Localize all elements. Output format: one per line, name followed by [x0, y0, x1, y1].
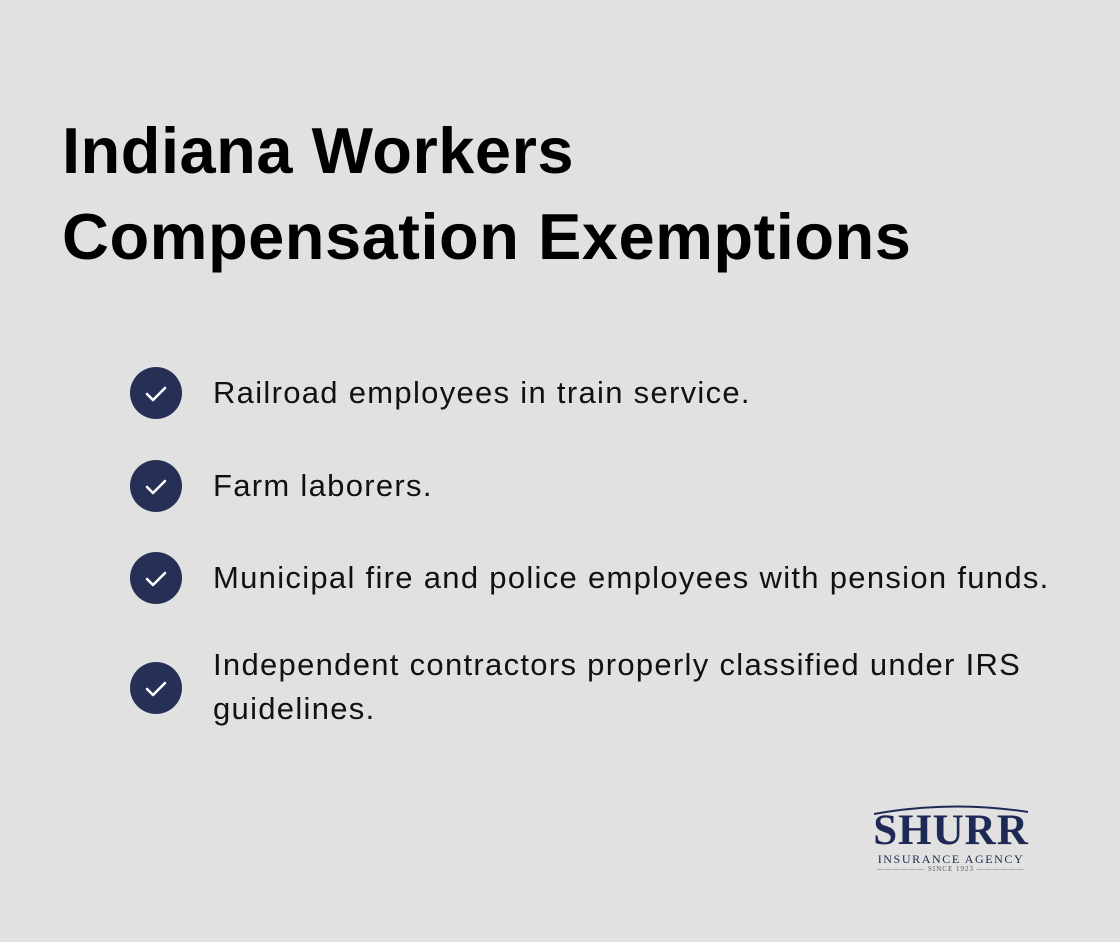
text: Farm laborers. — [213, 468, 433, 503]
icon: check — [130, 460, 182, 512]
icon: check — [130, 552, 182, 604]
item: railroad — [130, 367, 751, 419]
logo: SHURR — [873, 807, 1029, 854]
text — [213, 647, 1021, 726]
item: contractors — [130, 647, 1021, 726]
logo — [873, 806, 1029, 873]
text: Independent contractors properly classified under IRS — [213, 647, 1021, 682]
text: Railroad employees in train service. — [213, 375, 751, 410]
icon: check — [130, 367, 182, 419]
text: Municipal fire and police employees with pension funds. — [213, 560, 1050, 595]
text: guidelines. — [213, 691, 376, 726]
item: farm — [130, 460, 433, 512]
logo: INSURANCE AGENCY — [878, 852, 1024, 866]
title: Compensation Exemptions — [62, 200, 911, 273]
title — [62, 114, 911, 273]
title: Indiana Workers — [62, 114, 574, 187]
icon: check — [130, 662, 182, 714]
item: municipal — [130, 552, 1050, 604]
logo: —————— SINCE 1923 —————— — [877, 865, 1025, 873]
